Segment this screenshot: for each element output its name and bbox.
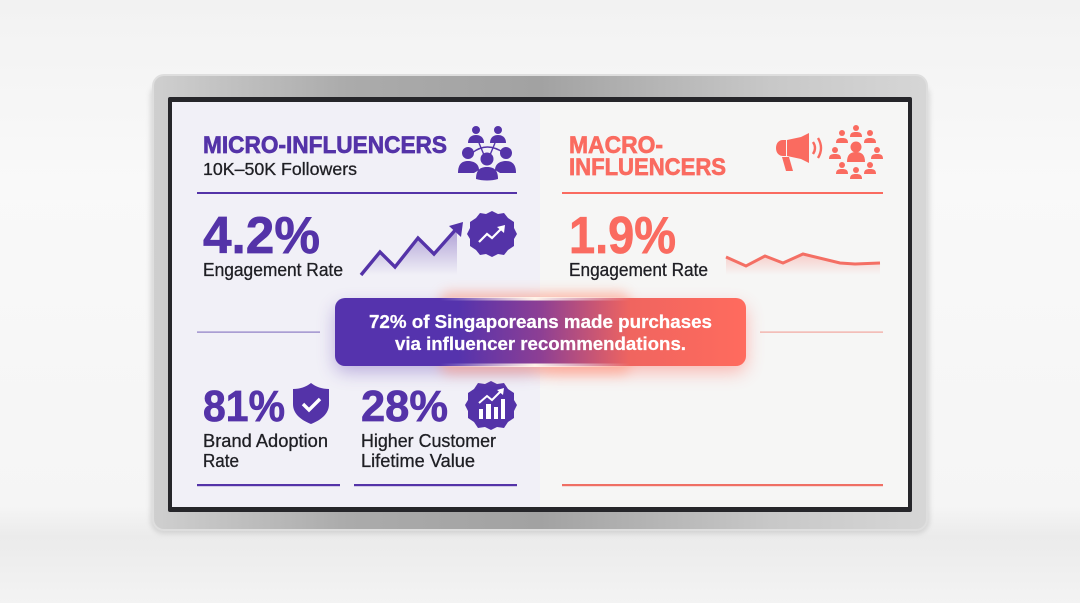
chart: flat line	[726, 254, 880, 275]
thin divider left	[197, 332, 320, 333]
label: engagement rate: Engagement Rate	[569, 260, 708, 280]
stat: 4.2%: 4.2%	[203, 207, 320, 265]
callout glow	[335, 292, 746, 374]
stat: 81% brand adoption: Rate	[203, 451, 239, 471]
thin divider right	[760, 332, 883, 333]
divider	[197, 192, 517, 194]
chart: rising line	[361, 222, 463, 275]
icon: shield check	[293, 383, 329, 424]
stat: 28% customer lifetime value: Higher Customer	[361, 431, 496, 451]
icon: bar chart badge	[465, 381, 517, 430]
panel: macro-influencers background	[540, 102, 908, 507]
callout: 72% statistic: 72% of Singaporeans made purchases	[369, 311, 712, 332]
heading: macro-influencers: MACRO-	[569, 132, 663, 159]
heading: micro-influencers: MICRO-INFLUENCERS	[203, 132, 447, 159]
stat: 81% brand adoption: Brand Adoption	[203, 431, 328, 451]
stat: 81% brand adoption	[203, 382, 328, 471]
stat: 81% brand adoption: 81%	[203, 382, 285, 431]
stat: 1.9%: 1.9%	[569, 207, 676, 265]
divider	[354, 484, 517, 486]
stat: 28% customer lifetime value: 28%	[361, 382, 448, 431]
icon: audience crowd	[829, 125, 883, 179]
panel: micro-influencers background	[172, 102, 540, 507]
panel: macro-influencers	[562, 125, 883, 486]
icon: megaphone	[776, 133, 821, 171]
stat: 28% customer lifetime value	[361, 382, 496, 471]
divider	[562, 484, 883, 486]
stat: 28% customer lifetime value: Lifetime Value	[361, 451, 475, 471]
icon: growth badge	[467, 211, 517, 257]
label: engagement rate: Engagement Rate	[203, 260, 343, 280]
panel: micro-influencers	[197, 126, 517, 486]
heading: macro-influencers: INFLUENCERS	[569, 154, 726, 181]
subheading: follower range: 10K–50K Followers	[203, 159, 357, 179]
monitor frame	[150, 74, 930, 534]
callout: 72% statistic: via influencer recommendations.	[395, 333, 686, 354]
divider	[197, 484, 340, 486]
callout: 72% statistic	[335, 297, 746, 367]
icon: community group	[458, 126, 516, 180]
divider	[562, 192, 883, 194]
